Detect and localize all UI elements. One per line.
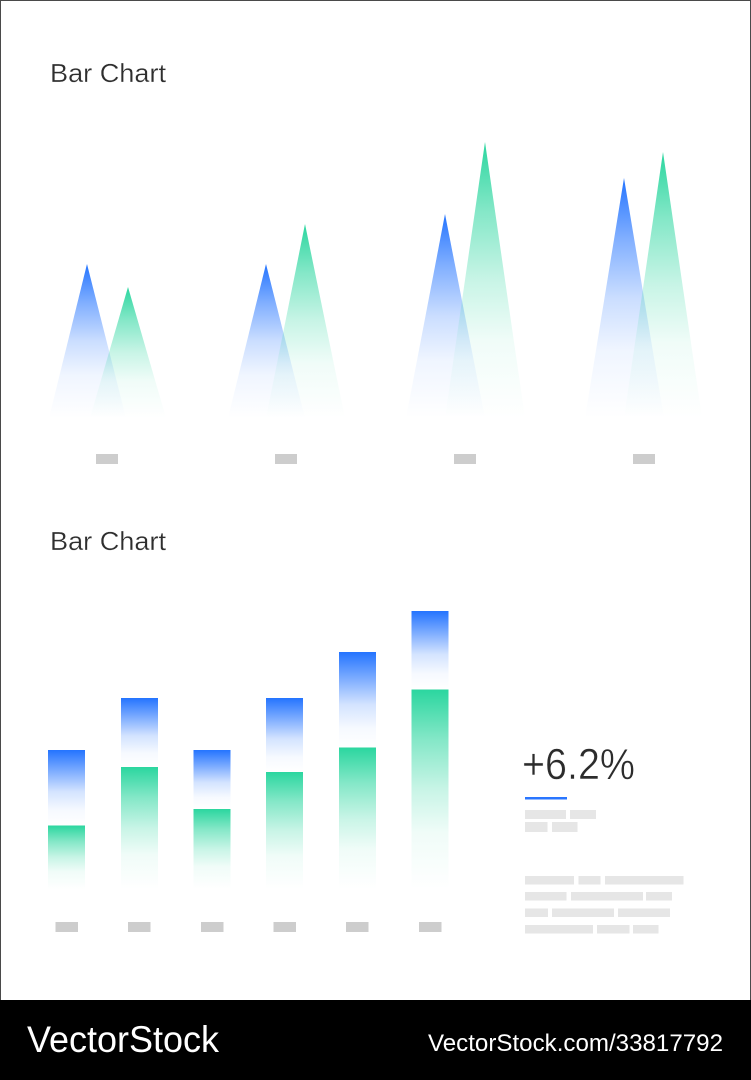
stat value: +6.2%	[522, 740, 635, 789]
bar 2	[121, 698, 158, 889]
group 1 triangles	[49, 264, 166, 418]
bar 1	[48, 750, 85, 890]
group 2 triangles	[228, 224, 345, 418]
group 3 triangles	[406, 142, 525, 418]
stat caption placeholders	[525, 810, 596, 832]
bar 5	[339, 652, 376, 889]
axis label placeholders	[56, 922, 442, 932]
bar 6	[412, 611, 448, 889]
bar 3	[194, 750, 230, 889]
heading: top bar chart: Bar Chart	[50, 58, 167, 88]
axis label placeholders	[96, 454, 655, 464]
stat callout	[522, 740, 684, 934]
accent line	[525, 797, 567, 800]
image reference: VectorStock.com/33817792	[428, 1030, 723, 1057]
brand name: VectorStock	[27, 1019, 219, 1060]
footer watermark bar	[0, 1000, 751, 1080]
bar 4	[266, 698, 303, 889]
paragraph placeholders	[525, 876, 684, 934]
heading: bottom bar chart: Bar Chart	[50, 526, 167, 556]
triangle bar chart	[49, 142, 702, 464]
stacked bar chart	[48, 611, 448, 932]
group 4 triangles	[585, 152, 702, 418]
